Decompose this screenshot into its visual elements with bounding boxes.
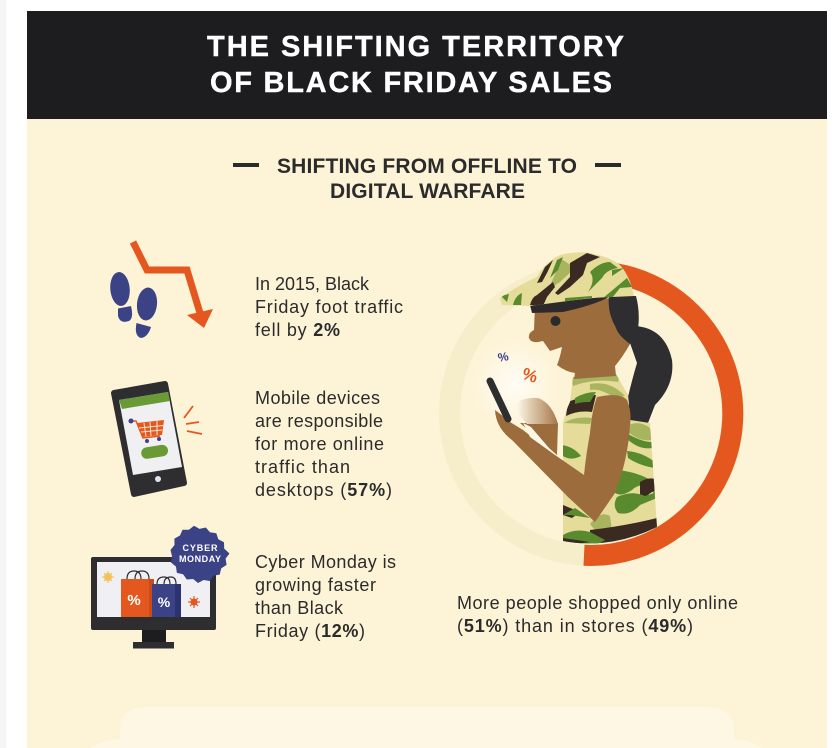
title: THE SHIFTING TERRITORY — [207, 31, 624, 63]
text: foot traffic — [255, 274, 403, 340]
badge: cyber monday: MONDAY — [179, 554, 221, 564]
text: mobile devices: traffic than — [255, 457, 350, 477]
shopping bags: % — [127, 592, 141, 609]
section heading — [233, 155, 621, 203]
phone — [490, 381, 508, 419]
badge: cyber monday — [170, 526, 230, 583]
text: foot traffic: fell by 2% — [255, 320, 340, 340]
arm and hand — [495, 395, 631, 522]
section heading: DIGITAL WARFARE — [330, 180, 525, 203]
text: mobile devices: Mobile devices — [255, 388, 380, 408]
text: mobile devices: are responsible — [255, 411, 383, 431]
header banner — [27, 11, 827, 119]
text: cyber monday: Cyber Monday is — [255, 552, 396, 572]
text: online versus stores: More people shopped only online — [457, 593, 738, 613]
text: mobile devices: for more online — [255, 434, 384, 454]
percent signs: % — [497, 349, 510, 365]
eye — [550, 316, 560, 326]
cart — [128, 418, 164, 443]
ponytail — [628, 326, 672, 423]
icon: monitor with shopping bags — [91, 526, 230, 648]
icon: mobile phone with cart — [114, 384, 202, 494]
hair — [609, 296, 639, 344]
text: cyber monday: than Black — [255, 598, 344, 618]
illustration: woman in camouflage with phone — [470, 248, 672, 550]
glow from phone — [470, 337, 560, 433]
section heading: SHIFTING FROM OFFLINE TO — [277, 155, 577, 178]
ring chart: online versus stores — [450, 272, 734, 556]
lower panel — [91, 707, 762, 748]
tank top — [563, 374, 657, 544]
shopping bags: % — [158, 594, 171, 610]
shopping bags — [121, 571, 181, 617]
text: cyber monday: Friday (12%) — [255, 621, 365, 641]
illustration: woman in camouflage with phone: % — [520, 364, 540, 387]
face and neck — [529, 298, 630, 379]
cap — [500, 252, 634, 313]
text: mobile devices: desktops (57%) — [255, 480, 392, 500]
text: cyber monday: growing faster — [255, 575, 376, 595]
title — [207, 31, 624, 99]
text: foot traffic: In 2015, Black — [255, 274, 370, 294]
text: mobile devices — [255, 388, 392, 500]
text: online versus stores — [457, 593, 738, 636]
badge: cyber monday: CYBER — [182, 543, 218, 553]
text: online versus stores: (51%) than in stores (49%) — [457, 616, 693, 636]
fingers — [513, 398, 558, 424]
icon: footprints and falling arrow — [109, 242, 213, 338]
text: cyber monday — [255, 552, 396, 641]
text: foot traffic: Friday foot traffic — [255, 297, 403, 317]
title: OF BLACK FRIDAY SALES — [210, 67, 612, 99]
